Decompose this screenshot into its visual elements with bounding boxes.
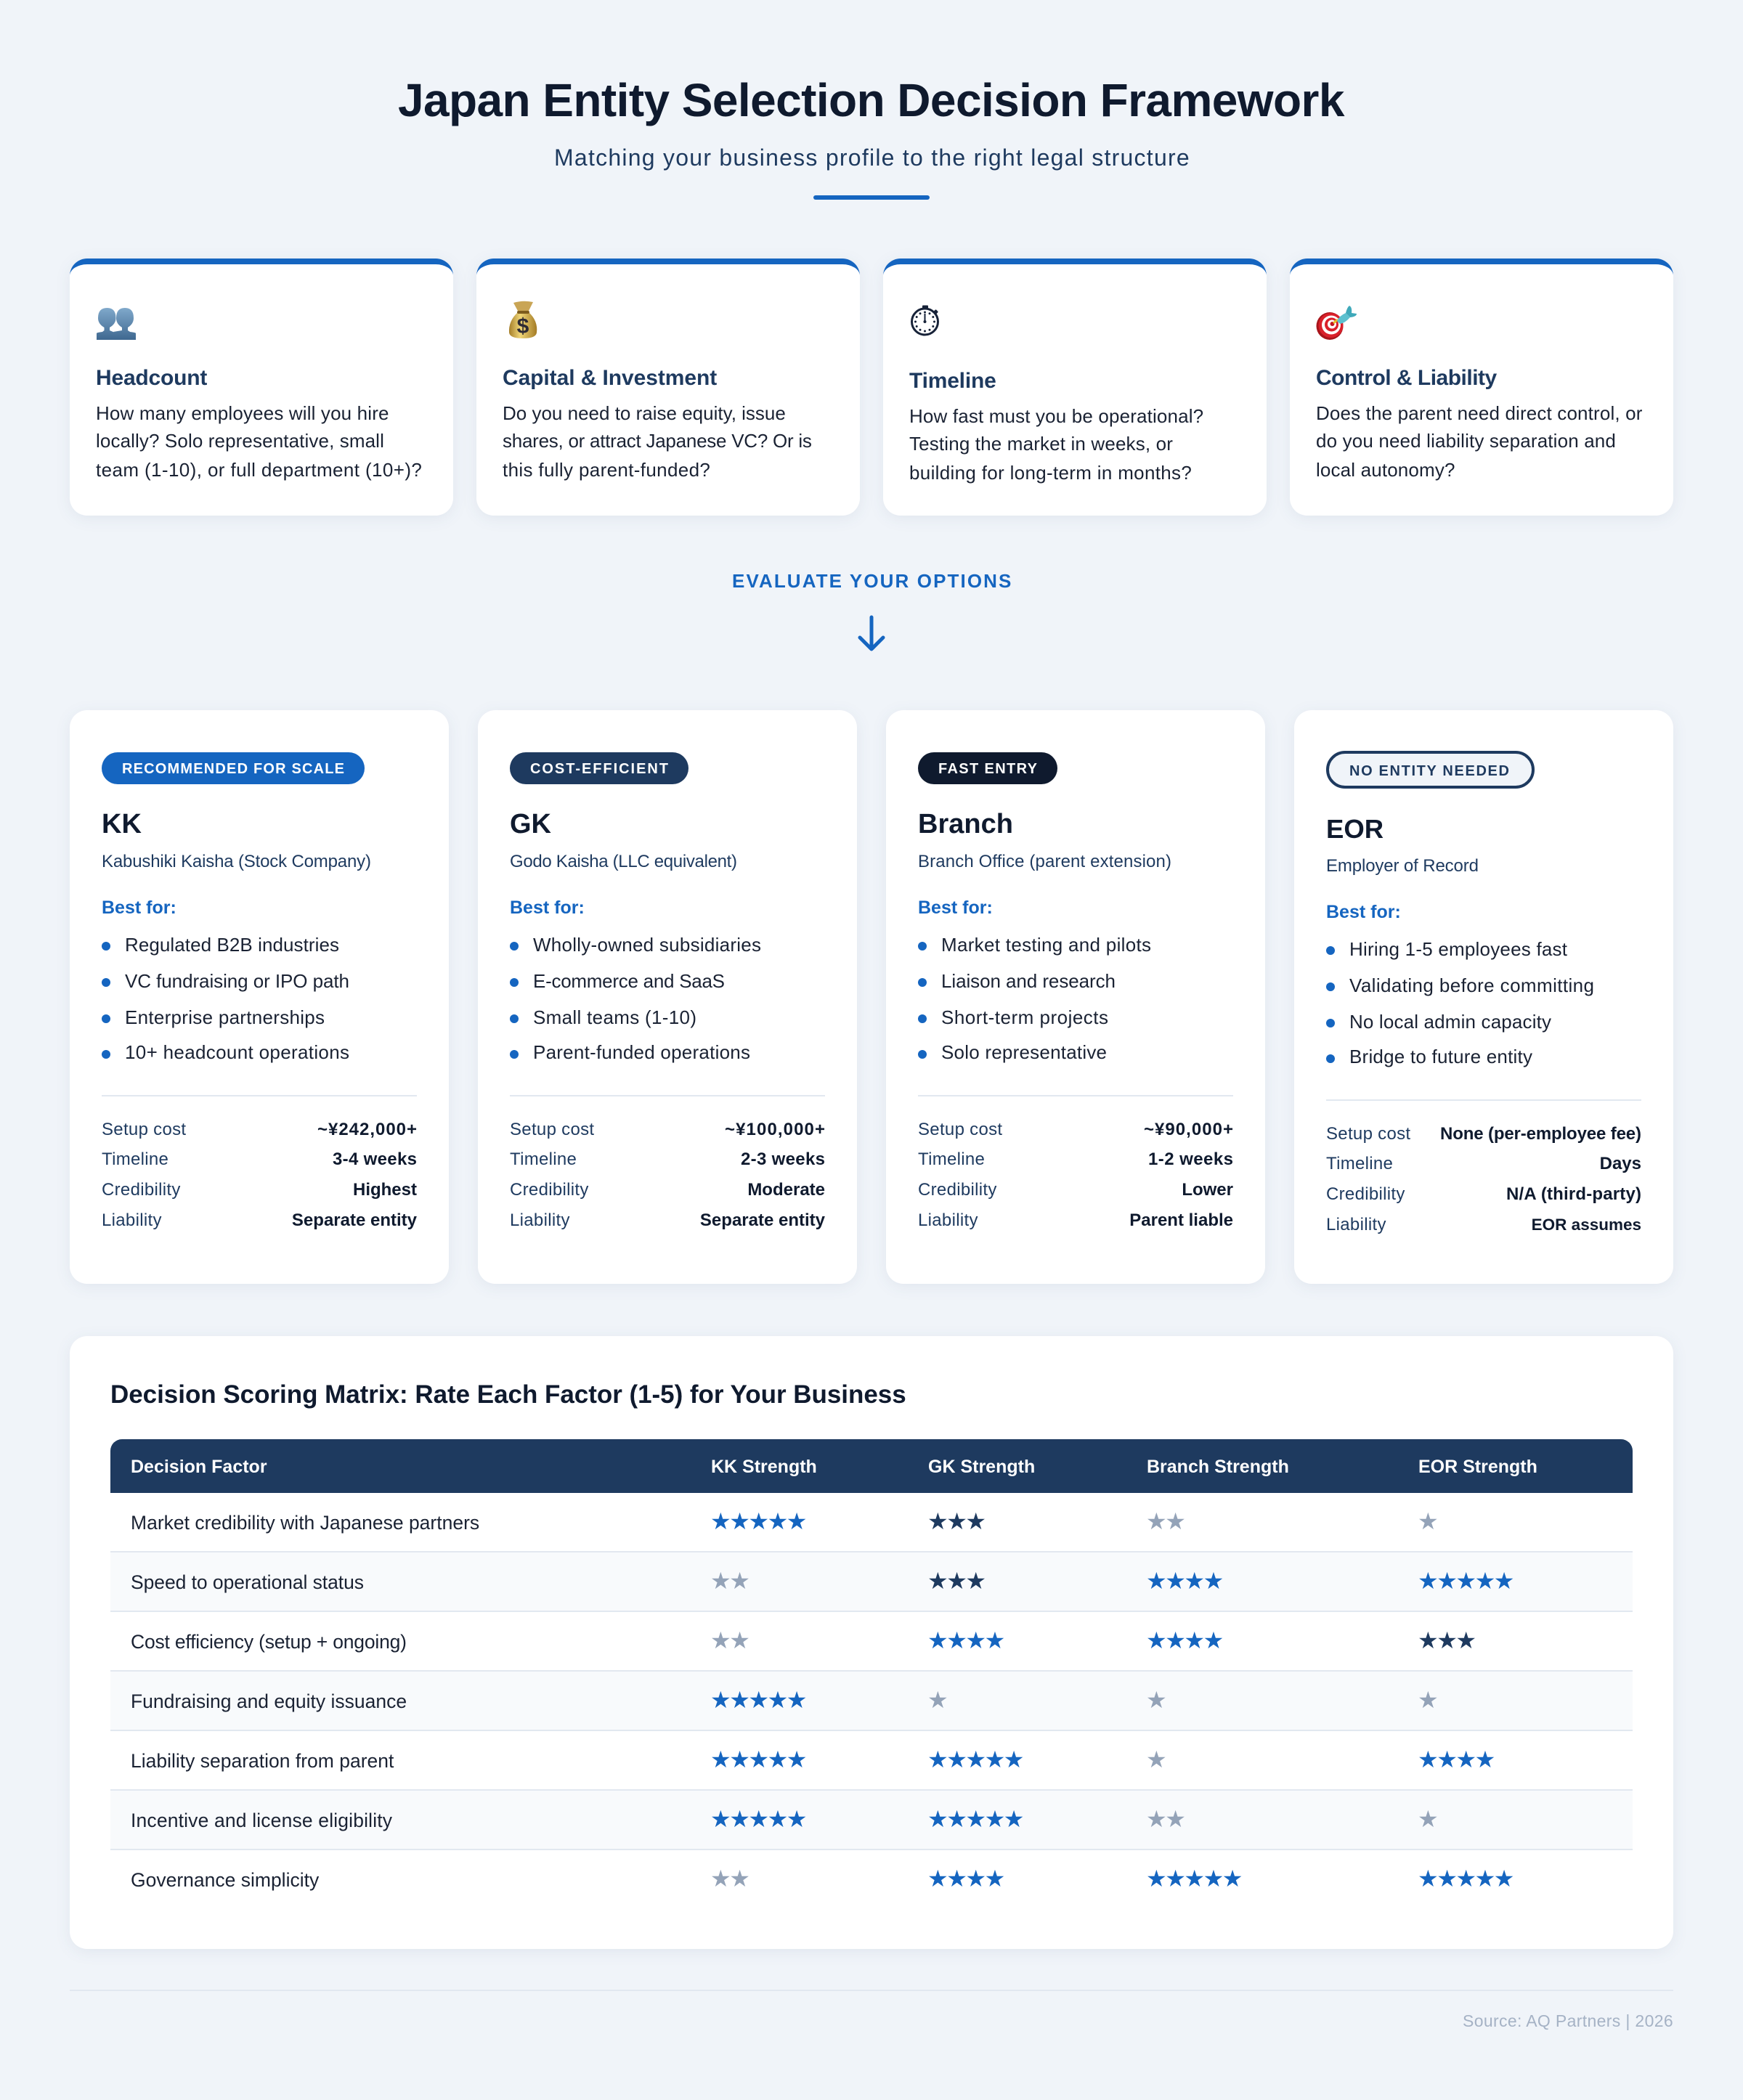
stats: ~¥90,000+ (1144, 1120, 1233, 1139)
description: shares, or attract Japanese VC? Or is (503, 430, 812, 452)
badge: COST-EFFICIENT (530, 761, 668, 777)
table rows: ★★★★★ (710, 1746, 806, 1773)
description: building for long-term in months? (909, 462, 1192, 484)
table rows (110, 1507, 1633, 1892)
badge (918, 752, 1057, 784)
stats: EOR assumes (1532, 1216, 1641, 1234)
best for label: Best for: (102, 898, 176, 918)
table rows: ★ (927, 1686, 947, 1714)
best for list: Hiring 1-5 employees fast (1349, 938, 1568, 960)
stats: Lower (1182, 1180, 1233, 1200)
entity name: Branch (918, 809, 1013, 839)
table rows: ★ (1418, 1507, 1437, 1535)
stats: Days (1600, 1154, 1641, 1173)
best for list: Market testing and pilots (941, 934, 1151, 956)
icon: money bag (509, 301, 537, 338)
stats: Setup cost (510, 1120, 594, 1139)
best for list: Parent-funded operations (533, 1041, 750, 1063)
panel: decision scoring matrix (70, 1336, 1673, 1949)
table rows: ★ (1418, 1686, 1437, 1714)
stats: Separate entity (700, 1210, 826, 1230)
matrix heading: Decision Scoring Matrix: Rate Each Factor (1-5) for Your Business (110, 1380, 906, 1409)
source footer: Source: AQ Partners | 2026 (1463, 2011, 1673, 2030)
table rows: ★ (1146, 1686, 1166, 1714)
badge (102, 752, 365, 784)
entity full name: Branch Office (parent extension) (918, 852, 1171, 871)
best for list: Short-term projects (941, 1006, 1108, 1028)
panel: EOR (1294, 710, 1673, 1284)
table rows: ★★ (1146, 1507, 1185, 1535)
heading: Headcount (96, 366, 207, 390)
badge: NO ENTITY NEEDED (1349, 763, 1509, 779)
description: Do you need to raise equity, issue (503, 402, 786, 424)
best for list: Enterprise partnerships (125, 1006, 325, 1028)
panel: headcount (70, 259, 453, 516)
table rows: Fundraising and equity issuance (131, 1690, 407, 1712)
stats: Moderate (747, 1180, 825, 1200)
badge (1328, 752, 1533, 787)
stats: Credibility (918, 1180, 997, 1200)
description: team (1-10), or full department (10+)? (96, 459, 422, 481)
table header: KK Strength (711, 1457, 817, 1477)
best for list: No local admin capacity (1349, 1011, 1551, 1033)
panel: GK (478, 710, 857, 1284)
table rows: ★★ (710, 1567, 749, 1595)
table header (110, 1439, 1633, 1493)
panel: capital and investment (476, 259, 860, 516)
heading: Capital & Investment (503, 366, 717, 390)
table rows: ★ (1146, 1746, 1166, 1773)
table rows: Liability separation from parent (131, 1750, 394, 1772)
stats: Timeline (918, 1149, 985, 1169)
description (1316, 402, 1643, 481)
description: do you need liability separation and (1316, 430, 1616, 452)
icon: dart target (1316, 306, 1357, 340)
panel: Branch (886, 710, 1265, 1284)
stats: Setup cost (1326, 1124, 1410, 1144)
description: locally? Solo representative, small (96, 430, 384, 452)
stats: Highest (353, 1180, 417, 1200)
description: local autonomy? (1316, 459, 1455, 481)
table rows: ★ (1418, 1805, 1437, 1833)
stats: Parent liable (1129, 1210, 1233, 1230)
table rows: ★★★ (927, 1567, 985, 1595)
best for label: Best for: (918, 898, 993, 918)
best for list: Small teams (1-10) (533, 1006, 696, 1028)
table rows: Governance simplicity (131, 1869, 320, 1891)
entity full name: Kabushiki Kaisha (Stock Company) (102, 852, 371, 871)
icon: stopwatch (912, 305, 938, 335)
stats: Credibility (1326, 1184, 1405, 1204)
best for list: Solo representative (941, 1041, 1107, 1063)
table rows: ★★★★★ (710, 1507, 806, 1535)
stats: ~¥100,000+ (725, 1120, 825, 1139)
stats (1326, 1124, 1641, 1234)
entity name: GK (510, 809, 552, 839)
table rows: ★★★★ (927, 1865, 1004, 1892)
stats: Timeline (1326, 1154, 1393, 1173)
table rows: ★★★★ (1418, 1746, 1495, 1773)
table rows: ★★★★ (1146, 1627, 1223, 1654)
stats (102, 1120, 418, 1230)
best for list: 10+ headcount operations (125, 1041, 349, 1063)
table rows: ★★★★★ (927, 1746, 1023, 1773)
table rows: ★★ (1146, 1805, 1185, 1833)
table rows: ★★★ (927, 1507, 985, 1535)
best for list (510, 934, 761, 1063)
table header: GK Strength (928, 1457, 1035, 1477)
table header: Branch Strength (1147, 1457, 1289, 1477)
best for label: Best for: (1326, 902, 1401, 922)
entity full name: Employer of Record (1326, 856, 1479, 876)
description: Testing the market in weeks, or (909, 433, 1173, 455)
best for label: Best for: (510, 898, 585, 918)
table rows: Incentive and license eligibility (131, 1810, 393, 1831)
stats: Separate entity (292, 1210, 418, 1230)
table header: Decision Factor (131, 1457, 267, 1477)
stats: Timeline (102, 1149, 168, 1169)
stats (918, 1120, 1233, 1230)
table rows: Cost efficiency (setup + ongoing) (131, 1631, 407, 1653)
table rows: Market credibility with Japanese partners (131, 1512, 479, 1534)
best for list (1326, 938, 1594, 1067)
stats: N/A (third-party) (1506, 1184, 1641, 1204)
entity full name: Godo Kaisha (LLC equivalent) (510, 852, 737, 871)
badge (510, 752, 688, 784)
best for list: Regulated B2B industries (125, 934, 339, 956)
stats: Liability (102, 1210, 162, 1230)
best for list (918, 934, 1151, 1063)
description: this fully parent-funded? (503, 459, 710, 481)
stats: 3-4 weeks (333, 1149, 417, 1169)
table rows: ★★★★★ (710, 1686, 806, 1714)
description (96, 402, 422, 481)
table rows: ★★★★ (927, 1627, 1004, 1654)
best for list: Wholly-owned subsidiaries (533, 934, 761, 956)
panel: control and liability (1290, 259, 1673, 516)
table rows: ★★ (710, 1627, 749, 1654)
best for list: VC fundraising or IPO path (125, 970, 349, 992)
section label: EVALUATE YOUR OPTIONS (732, 570, 1012, 592)
description: Does the parent need direct control, or (1316, 402, 1643, 424)
subtitle: Matching your business profile to the right legal structure (554, 145, 1190, 171)
stats: ~¥242,000+ (317, 1120, 417, 1139)
table rows: ★★★★★ (927, 1805, 1023, 1833)
best for list: E-commerce and SaaS (533, 970, 725, 992)
stats (510, 1120, 826, 1230)
heading: Timeline (909, 369, 996, 393)
stats: Liability (1326, 1215, 1386, 1234)
description: How fast must you be operational? (909, 405, 1203, 427)
best for list (102, 934, 349, 1063)
table rows: ★★★★★ (1418, 1567, 1514, 1595)
stats: Setup cost (102, 1120, 186, 1139)
entity name: KK (102, 809, 142, 839)
stats: None (per-employee fee) (1440, 1124, 1641, 1144)
best for list: Validating before committing (1349, 974, 1594, 996)
table rows: ★★★ (1418, 1627, 1475, 1654)
arrow: down (860, 617, 883, 649)
table header: EOR Strength (1418, 1457, 1537, 1477)
panel: KK (70, 710, 449, 1284)
table rows: ★★★★★ (1418, 1865, 1514, 1892)
table rows: ★★★★★ (1146, 1865, 1242, 1892)
table rows: Speed to operational status (131, 1571, 364, 1593)
table rows: ★★ (710, 1865, 749, 1892)
stats: Liability (918, 1210, 978, 1230)
badge: FAST ENTRY (938, 761, 1038, 777)
best for list: Liaison and research (941, 970, 1116, 992)
icon: busts (97, 308, 136, 340)
entity name: EOR (1326, 814, 1384, 844)
table rows: ★★★★ (1146, 1567, 1223, 1595)
title: Japan Entity Selection Decision Framework (398, 74, 1345, 126)
stats: 2-3 weeks (741, 1149, 825, 1169)
table rows: ★★★★★ (710, 1805, 806, 1833)
stats: 1-2 weeks (1148, 1149, 1233, 1169)
stats: Liability (510, 1210, 570, 1230)
stats: Credibility (510, 1180, 589, 1200)
stats: Credibility (102, 1180, 181, 1200)
description (909, 405, 1203, 484)
icon: money bag: $ (517, 314, 529, 338)
description: How many employees will you hire (96, 402, 389, 424)
heading: Control & Liability (1316, 366, 1498, 390)
description (503, 402, 812, 481)
best for list: Bridge to future entity (1349, 1046, 1532, 1067)
stats: Setup cost (918, 1120, 1002, 1139)
stats: Timeline (510, 1149, 577, 1169)
panel: timeline (883, 259, 1267, 516)
accent bar (813, 195, 930, 200)
badge: RECOMMENDED FOR SCALE (122, 761, 344, 777)
